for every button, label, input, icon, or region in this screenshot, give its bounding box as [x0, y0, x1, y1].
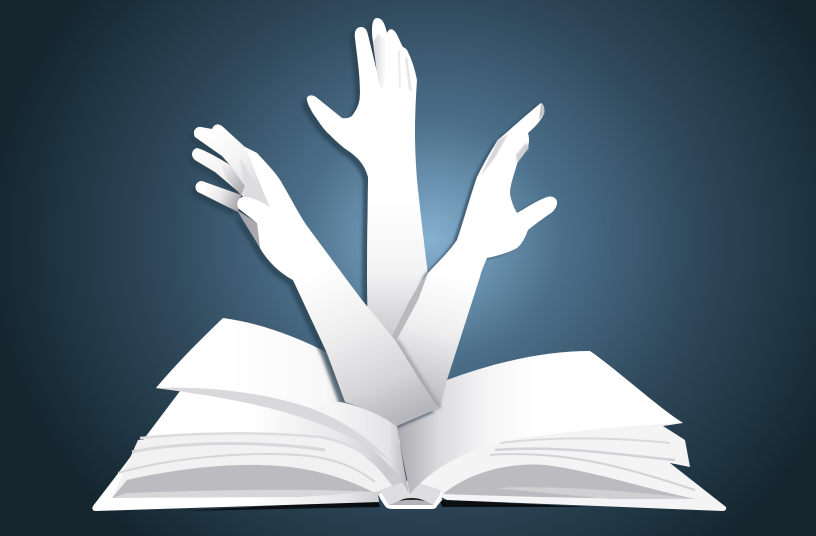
- shadow of right arm on centre arm: [392, 273, 428, 341]
- hand and arm: [237, 147, 439, 426]
- book: left page curved band over arm: [300, 402, 409, 494]
- book: spine: [378, 480, 442, 509]
- book: upper left page: [156, 318, 400, 470]
- arm: left reaching hand: [192, 124, 439, 426]
- light band beside palm: [240, 158, 270, 207]
- arm: right reaching hand: [395, 103, 557, 408]
- open book: lower page blocks: [92, 391, 726, 511]
- back finger shading: [480, 134, 508, 177]
- lowest finger: [195, 181, 241, 212]
- book: right page block: [415, 423, 726, 511]
- finger shading: [373, 34, 412, 92]
- two upper fingers: [192, 124, 273, 210]
- shadow below thumb: [237, 210, 260, 248]
- book: upper right page: [396, 351, 683, 494]
- arm: centre raised hand: [307, 18, 428, 345]
- fingers: [192, 124, 273, 248]
- book: left page block: [92, 391, 405, 511]
- book: left page edge fold: [156, 388, 392, 463]
- dark inner finger shading: [222, 165, 245, 195]
- shadow of left arm on right arm: [396, 340, 440, 408]
- book: shadow under left arm: [322, 348, 350, 404]
- book: black cover shadow: [180, 500, 590, 511]
